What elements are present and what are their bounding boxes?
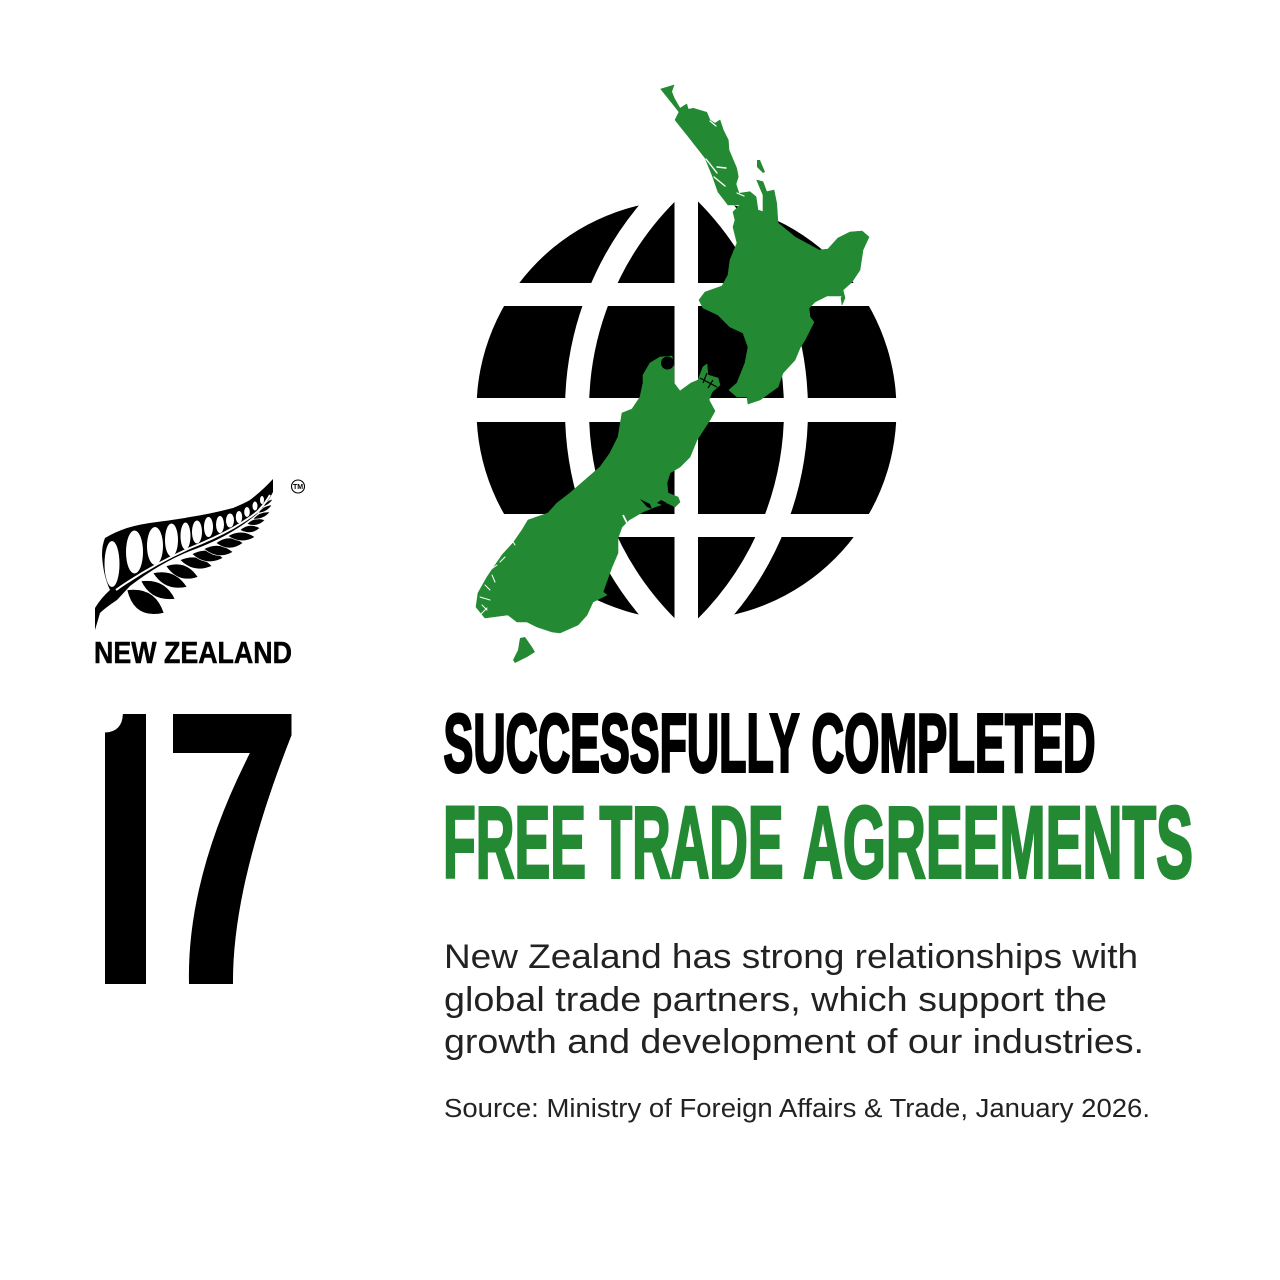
- body text: New Zealand has strong relationships with: [444, 938, 1138, 976]
- Stewart Island: [513, 637, 535, 663]
- body text: [444, 938, 1144, 1061]
- heading: [443, 696, 1193, 900]
- big number 17: 7: [155, 631, 303, 1068]
- body text: growth and development of our industries.: [444, 1023, 1144, 1061]
- icon: black globe: [180, 102, 1193, 718]
- big number 17: [105, 714, 292, 984]
- heading line 2: FREE: [443, 786, 586, 900]
- heading line 2: TRADE: [600, 786, 784, 900]
- heading line 2: [443, 786, 1193, 900]
- logo: silver fern New Zealand: [94, 479, 304, 670]
- icon: green map of New Zealand: [476, 85, 869, 663]
- icon: silver fern: [95, 479, 273, 630]
- icon: trademark: [292, 480, 304, 493]
- big number 17: 1: [36, 629, 202, 1067]
- icon: trademark: TM: [293, 484, 303, 491]
- North Island: [661, 85, 869, 404]
- body text: global trade partners, which support the: [444, 981, 1107, 1019]
- South Island: [476, 356, 720, 633]
- heading line 1: SUCCESSFULLY: [444, 696, 800, 790]
- logo wordmark: NEW ZEALAND: [94, 635, 292, 670]
- source note: Source: Ministry of Foreign Affairs & Trade, January 2026.: [444, 1095, 1150, 1123]
